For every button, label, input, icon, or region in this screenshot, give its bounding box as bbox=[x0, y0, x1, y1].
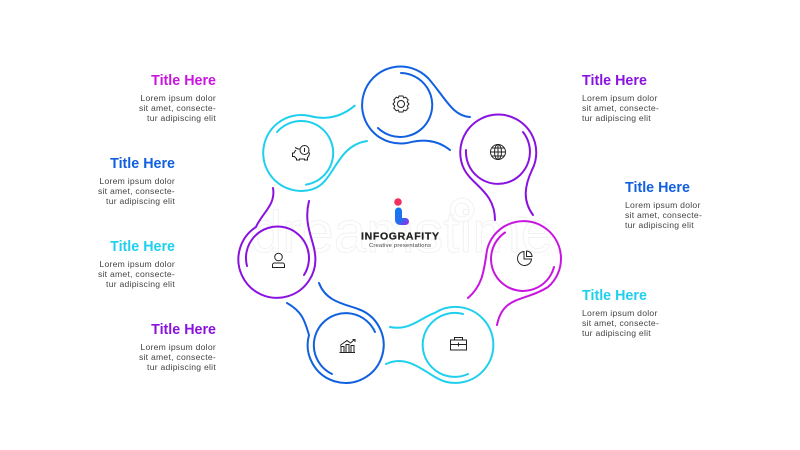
text block: left 4: sit amet, consecte- bbox=[139, 352, 216, 362]
icon: bar chart bbox=[340, 340, 355, 352]
ring: briefcase segment bbox=[386, 307, 493, 383]
ring: globe segment bbox=[460, 115, 536, 220]
text block: right 1: Lorem ipsum dolor bbox=[582, 93, 658, 103]
text block: right 3: tur adipiscing elit bbox=[582, 328, 651, 338]
watermark: dreamstime bbox=[250, 200, 553, 265]
text block: left 1: Lorem ipsum dolor bbox=[140, 93, 216, 103]
icon: briefcase bbox=[450, 338, 466, 350]
icon: pie chart bbox=[518, 251, 532, 265]
text block: left 3: Title Here bbox=[110, 239, 175, 255]
logo bbox=[394, 198, 409, 225]
text block: left 2: sit amet, consecte- bbox=[98, 186, 175, 196]
text block: right 2: Lorem ipsum dolor bbox=[625, 200, 701, 210]
text block: right 2 bbox=[625, 180, 702, 230]
text block: left 2: Title Here bbox=[110, 156, 175, 172]
icon: piggy bank bbox=[292, 146, 310, 160]
text block: right 2: sit amet, consecte- bbox=[625, 210, 702, 220]
icon: person bbox=[272, 253, 284, 268]
ring: chart segment bbox=[287, 283, 384, 383]
text block: right 1: tur adipiscing elit bbox=[582, 113, 651, 123]
text block: left 4 bbox=[139, 322, 216, 372]
ring: piggy segment bbox=[263, 106, 367, 191]
text block: left 2: Lorem ipsum dolor bbox=[99, 176, 175, 186]
text block: left 1: tur adipiscing elit bbox=[147, 113, 216, 123]
ring: pie segment bbox=[468, 221, 561, 325]
text block: right 2: tur adipiscing elit bbox=[625, 220, 694, 230]
text block: right 3: Lorem ipsum dolor bbox=[582, 308, 658, 318]
brand name: INFOGRAFITY bbox=[361, 230, 439, 242]
text block: left 2: tur adipiscing elit bbox=[106, 196, 175, 206]
text block: left 4: tur adipiscing elit bbox=[147, 362, 216, 372]
text block: left 1: sit amet, consecte- bbox=[139, 103, 216, 113]
text block: left 4: Title Here bbox=[151, 322, 216, 338]
text block: right 3: Title Here bbox=[582, 288, 647, 304]
text block: right 3: sit amet, consecte- bbox=[582, 318, 659, 328]
text block: left 1 bbox=[139, 73, 216, 123]
text block: right 3 bbox=[582, 288, 659, 338]
text block: left 3 bbox=[98, 239, 175, 289]
icon: globe bbox=[490, 144, 506, 160]
text block: left 3: tur adipiscing elit bbox=[106, 279, 175, 289]
text block: left 1: Title Here bbox=[151, 73, 216, 89]
text block: left 3: Lorem ipsum dolor bbox=[99, 259, 175, 269]
icon: gear bbox=[393, 96, 409, 112]
brand tagline: Creative presentations bbox=[369, 243, 431, 249]
text block: left 4: Lorem ipsum dolor bbox=[140, 342, 216, 352]
text block: right 1 bbox=[582, 73, 659, 123]
text block: left 2 bbox=[98, 156, 175, 206]
text block: left 3: sit amet, consecte- bbox=[98, 269, 175, 279]
ring: person segment bbox=[238, 188, 315, 298]
text block: right 1: sit amet, consecte- bbox=[582, 103, 659, 113]
ring: gear segment bbox=[362, 67, 470, 150]
text block: right 1: Title Here bbox=[582, 73, 647, 89]
text block: right 2: Title Here bbox=[625, 180, 690, 196]
